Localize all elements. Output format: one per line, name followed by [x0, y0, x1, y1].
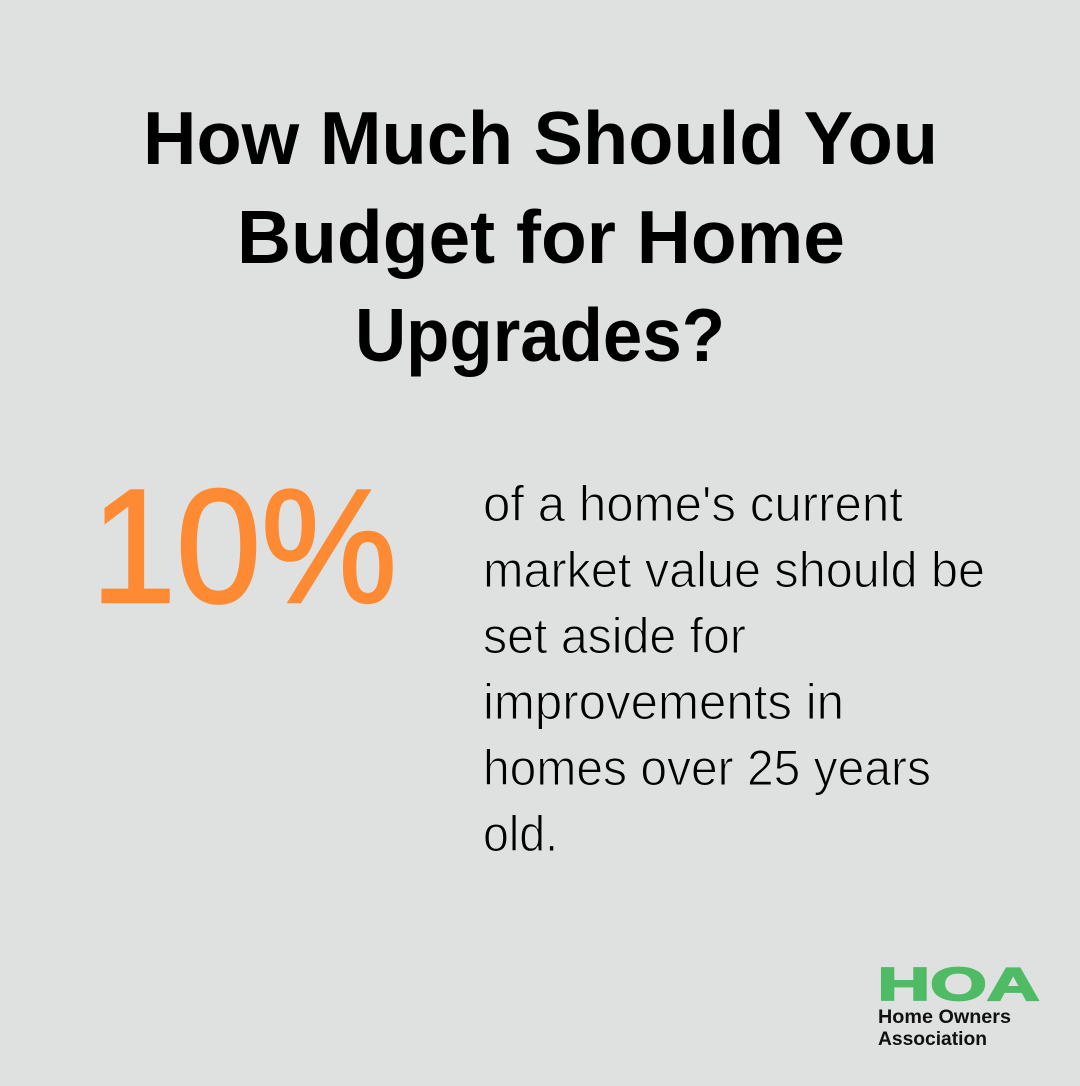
- title: Upgrades?: [355, 293, 725, 377]
- statistic description: homes over 25 years: [483, 740, 931, 796]
- title: Budget for Home: [237, 195, 845, 279]
- logo: HOA Home Owners Association: HOA: [878, 958, 1040, 1010]
- logo: HOA Home Owners Association: [878, 958, 1040, 1050]
- statistic description: old.: [483, 806, 558, 862]
- big statistic: 10%: 10%: [91, 456, 397, 637]
- statistic description: of a home's current: [483, 476, 903, 532]
- logo: HOA Home Owners Association: Home Owners: [878, 1007, 1011, 1028]
- title: How Much Should You: [143, 96, 938, 180]
- logo: HOA Home Owners Association: Association: [878, 1029, 987, 1050]
- statistic description: [483, 476, 985, 862]
- statistic description: market value should be: [483, 542, 985, 598]
- statistic description: improvements in: [483, 674, 844, 730]
- title: [143, 96, 938, 377]
- statistic description: set aside for: [483, 608, 746, 664]
